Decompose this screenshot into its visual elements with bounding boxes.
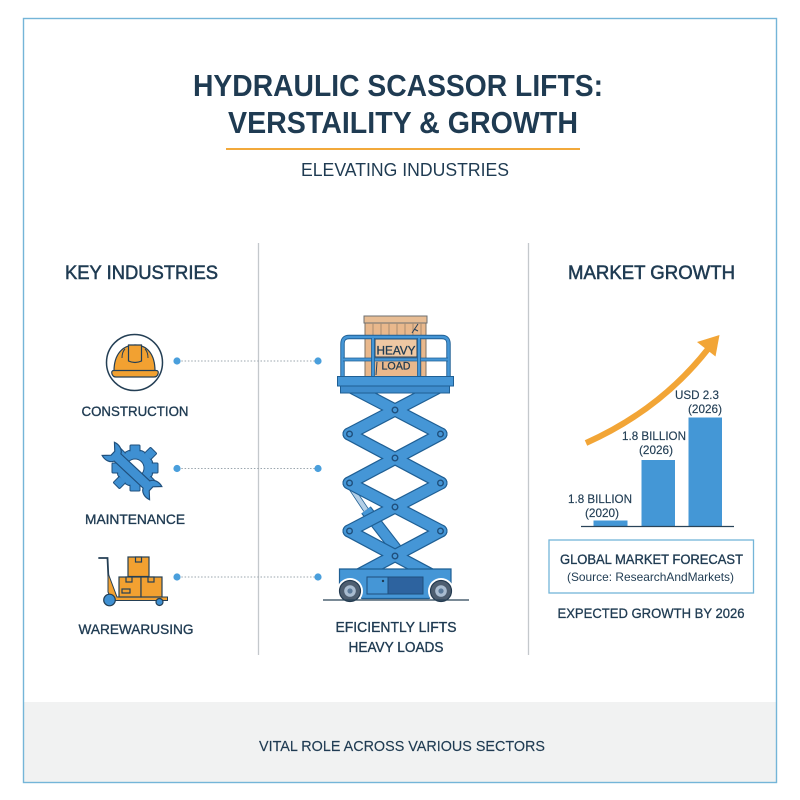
bar label 2020: 1.8 BILLION — [568, 492, 632, 506]
icon: warehouse trolley with boxes — [99, 557, 168, 606]
platform deck — [338, 376, 454, 393]
bar label 2020 — [568, 492, 632, 520]
bar label 2026 — [622, 429, 686, 457]
connector: warehousing — [173, 573, 322, 581]
connector: construction — [173, 357, 322, 365]
guard rail — [342, 337, 448, 377]
bar label 2020: (2020) — [585, 506, 619, 520]
title: HYDRAULIC SCASSOR LIFTS: — [193, 68, 603, 103]
heavy load crate — [364, 316, 427, 378]
lift base — [337, 569, 454, 604]
footer text: VITAL ROLE ACROSS VARIOUS SECTORS — [259, 739, 545, 755]
footer band — [24, 702, 776, 782]
lift caption — [336, 620, 456, 656]
label: construction: CONSTRUCTION — [82, 403, 188, 419]
scissor lift illustration — [323, 316, 469, 604]
callout: global market forecast — [549, 540, 754, 593]
heavy load crate: HEAVY — [376, 344, 416, 358]
bar label USD: (2026) — [688, 402, 722, 416]
callout: global market forecast: (Source: ResearchAndMarkets) — [567, 570, 734, 584]
bar label USD: USD 2.3 — [675, 388, 719, 402]
heavy load crate: LOAD — [382, 360, 411, 372]
hydraulic cylinder — [352, 489, 397, 550]
lift caption: EFICIENTLY LIFTS — [336, 620, 456, 636]
title — [193, 68, 603, 140]
heading: key industries: KEY INDUSTRIES — [65, 262, 218, 284]
bar label 2026: (2026) — [639, 443, 673, 457]
heading: market growth: MARKET GROWTH — [568, 262, 735, 284]
bar label 2026: 1.8 BILLION — [622, 429, 686, 443]
subtitle: ELEVATING INDUSTRIES — [301, 159, 509, 180]
label: warehousing: WAREWARUSING — [78, 621, 194, 637]
icon: hard hat — [106, 334, 162, 390]
bar chart: market forecast — [568, 335, 734, 526]
label: maintenance: MAINTENANCE — [85, 511, 185, 527]
scissor arms — [347, 386, 443, 580]
growth arrow — [586, 335, 720, 443]
lift caption: HEAVY LOADS — [348, 640, 444, 656]
icon: wrench and gear — [102, 442, 162, 500]
callout: global market forecast: GLOBAL MARKET FORECAST — [560, 552, 743, 567]
connector: maintenance — [173, 465, 322, 472]
growth caption: EXPECTED GROWTH BY 2026 — [558, 605, 745, 621]
title underline — [226, 148, 580, 150]
bar label USD — [675, 388, 722, 416]
title: VERSTAILITY & GROWTH — [228, 105, 578, 140]
